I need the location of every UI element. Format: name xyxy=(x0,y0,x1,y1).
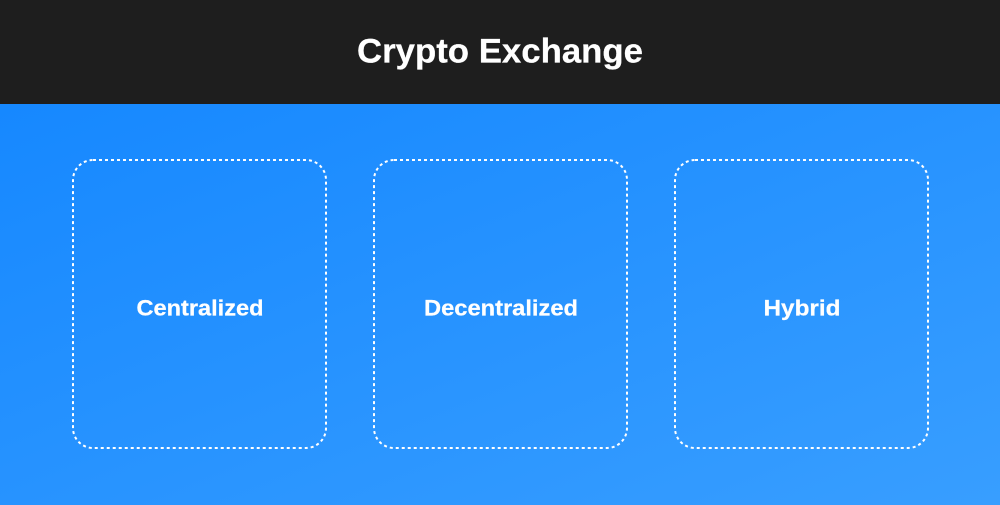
title: Crypto Exchange xyxy=(357,32,643,70)
label: centralized: Centralized xyxy=(136,296,264,320)
label: hybrid: Hybrid xyxy=(764,296,840,320)
panel: centralized xyxy=(73,160,326,448)
header bar xyxy=(0,0,1000,104)
panel: hybrid xyxy=(675,160,928,448)
background panel xyxy=(0,104,1000,505)
label: decentralized: Decentralized xyxy=(424,296,578,320)
panel: decentralized xyxy=(374,160,627,448)
